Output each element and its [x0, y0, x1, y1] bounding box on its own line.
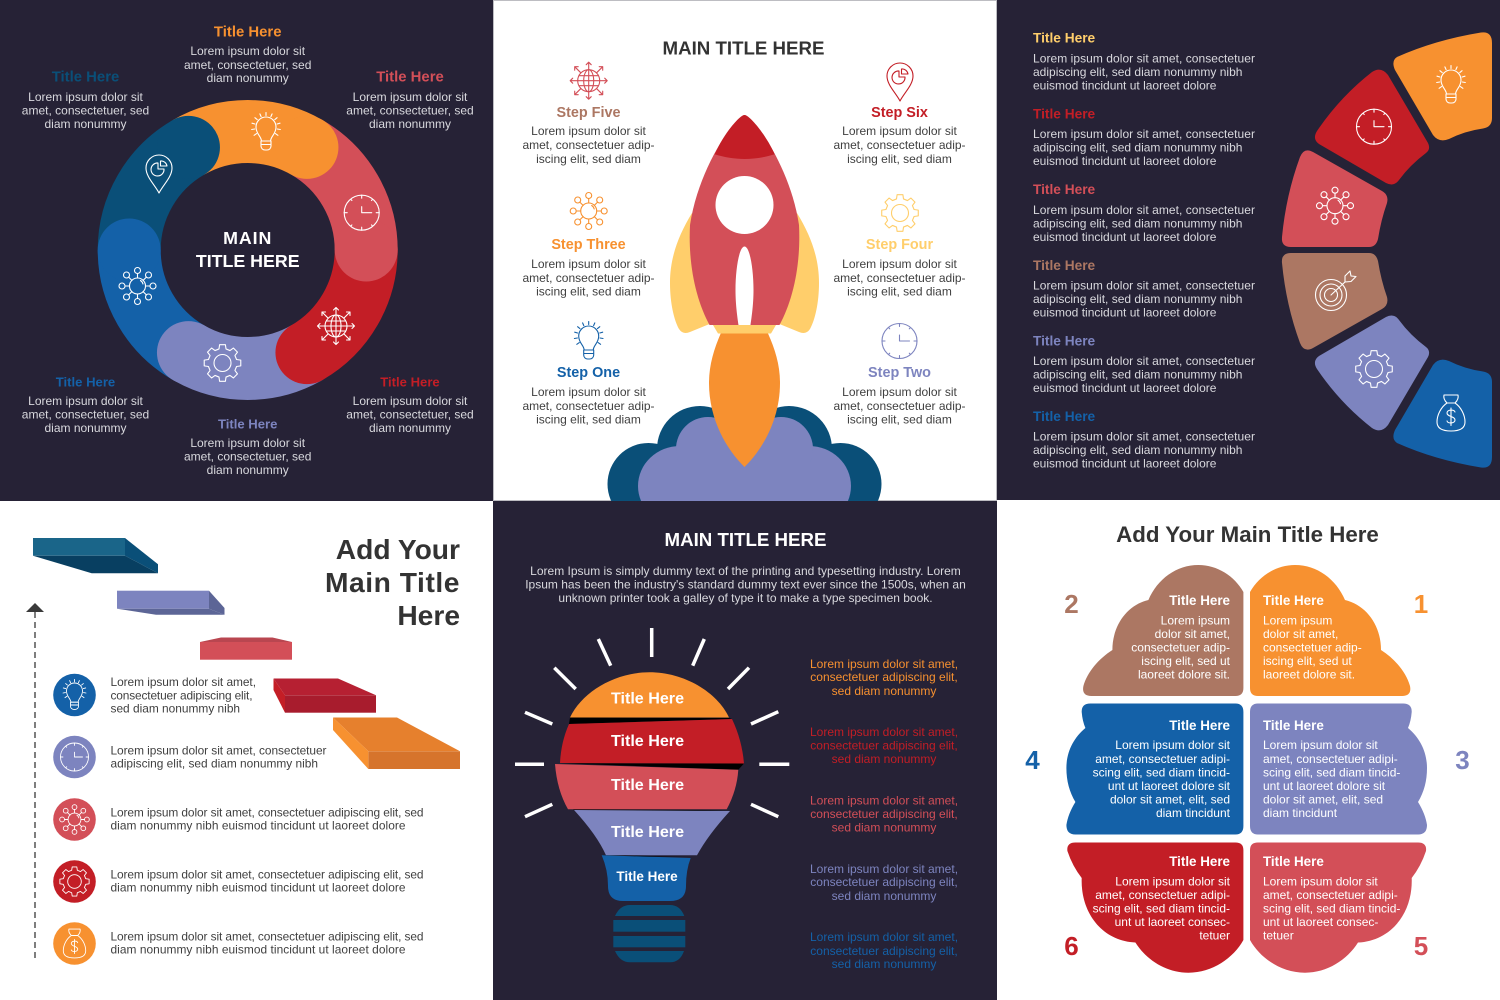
step six: amet, consectetuer adip- — [833, 138, 966, 152]
staircase title: Here — [397, 599, 460, 631]
card 1 text: iscing elit, sed ut — [1263, 654, 1352, 668]
list item 3: Title Here — [1033, 182, 1096, 197]
card 3 text: Lorem ipsum dolor sit — [1263, 738, 1378, 752]
list row 2 — [53, 736, 327, 778]
text: lower left: Lorem ipsum dolor sit — [28, 394, 144, 408]
list row 2: adipiscing elit, sed diam nonummy nibh — [110, 756, 318, 770]
rocket — [670, 115, 819, 467]
card 6 text: scing elit, sed diam tincid- — [1093, 902, 1230, 916]
side text periwinkle: Lorem ipsum dolor sit amet, — [810, 862, 958, 876]
list item 4: Title Here — [1033, 258, 1096, 273]
panel: light bulb — [493, 501, 997, 1000]
card 6 text: Title Here — [1169, 854, 1230, 869]
step six: Step Six — [871, 105, 928, 121]
list item 4: adipiscing elit, sed diam nonummy nibh — [1033, 292, 1242, 306]
list item 5 — [1033, 334, 1255, 395]
list row 1: Lorem ipsum dolor sit amet, — [110, 675, 256, 689]
card 3 text: amet, consectetuer adipi- — [1263, 752, 1398, 766]
step two: Lorem ipsum dolor sit — [842, 385, 958, 399]
card 1 text: Lorem ipsum — [1263, 614, 1332, 628]
step 3 salmon — [200, 638, 292, 660]
list item 6: Lorem ipsum dolor sit amet, consectetuer — [1033, 430, 1255, 444]
text: upper right: amet, consectetuer, sed — [346, 104, 474, 118]
card 1 text: dolor sit amet, — [1263, 627, 1338, 641]
list row 3: Lorem ipsum dolor sit amet, consectetuer adipiscing elit, sed — [110, 806, 424, 820]
numbers: 2 — [1064, 589, 1079, 619]
side text orange: sed diam nonummy — [832, 684, 936, 698]
bulb panel description: Lorem Ipsum is simply dummy text of the printing and typesetting industry. Lorem — [530, 564, 961, 578]
card 2 text: dolor sit amet, — [1155, 627, 1230, 641]
brain panel title: Add Your Main Title Here — [1116, 522, 1379, 547]
list item 3: Lorem ipsum dolor sit amet, consectetuer — [1033, 203, 1255, 217]
step four: amet, consectetuer adip- — [833, 271, 966, 285]
card 4 text: Lorem ipsum dolor sit — [1115, 738, 1231, 752]
list row 4: Lorem ipsum dolor sit amet, consectetuer adipiscing elit, sed — [110, 868, 424, 882]
bulb panel description — [525, 564, 966, 605]
list item 1 — [1033, 30, 1255, 92]
text: upper right: Title Here — [376, 70, 444, 86]
card 6 text: tetuer — [1199, 928, 1230, 942]
side text periwinkle: consectetuer adipiscing elit, — [810, 875, 958, 889]
text: upper right — [346, 70, 474, 131]
step one: iscing elit, sed diam — [536, 412, 641, 426]
numbers: 3 — [1455, 745, 1470, 775]
text: lower right: Title Here — [380, 374, 440, 390]
card 4 text: unt ut laoreet dolore sit — [1108, 779, 1231, 793]
card 6 text: unt ut laoreet consec- — [1115, 915, 1230, 929]
bulb labels: Title Here — [611, 823, 684, 841]
panel: brain cards — [997, 501, 1500, 1000]
step six: Lorem ipsum dolor sit — [842, 124, 958, 138]
step four: Lorem ipsum dolor sit — [842, 257, 958, 271]
list item 3 — [1033, 182, 1255, 244]
text: lower left: amet, consectetuer, sed — [22, 408, 149, 422]
text: bottom: Title Here — [218, 416, 277, 432]
petal shapes — [1282, 32, 1492, 468]
list item 4: euismod tincidunt ut laoreet dolore — [1033, 306, 1217, 320]
text: upper left: amet, consectetuer, sed — [22, 104, 149, 118]
ring center title: TITLE HERE — [196, 251, 300, 271]
step one — [522, 322, 655, 426]
text: bottom: Lorem ipsum dolor sit — [190, 436, 306, 450]
card 3 text: unt ut laoreet dolore sit — [1263, 779, 1386, 793]
side text red — [810, 725, 958, 766]
step three: amet, consectetuer adip- — [522, 271, 655, 285]
numbers: 1 — [1414, 589, 1428, 619]
card 5 text: scing elit, sed diam tincid- — [1263, 902, 1400, 916]
step two: Step Two — [868, 365, 931, 381]
staircase title: Add Your — [336, 533, 460, 565]
side text salmon — [810, 794, 958, 834]
bulb labels — [611, 690, 684, 884]
list item 2 — [1033, 106, 1255, 168]
list item 1: adipiscing elit, sed diam nonummy nibh — [1033, 65, 1242, 79]
text: upper left: diam nonummy — [44, 117, 127, 131]
list row 4: diam nonummy nibh euismod tincidunt ut laoreet dolore — [110, 880, 406, 894]
bulb labels: Title Here — [611, 732, 684, 750]
card 6 text — [1093, 854, 1231, 942]
cloud — [608, 406, 882, 501]
rocket panel title: MAIN TITLE HERE — [663, 38, 824, 58]
card 2 text: laoreet dolore sit. — [1138, 668, 1230, 682]
step five: iscing elit, sed diam — [536, 152, 641, 166]
side text red: sed diam nonummy — [832, 752, 936, 766]
petal icons — [1316, 66, 1465, 431]
list item 6 — [1033, 409, 1255, 470]
side text salmon: Lorem ipsum dolor sit amet, — [810, 794, 958, 808]
list item 5: Title Here — [1033, 334, 1096, 348]
card 2 text: iscing elit, sed ut — [1141, 654, 1231, 668]
numbers — [1025, 589, 1470, 961]
text: upper right: diam nonummy — [369, 117, 451, 131]
panel: staircase list — [0, 501, 493, 1000]
side text periwinkle — [810, 862, 958, 903]
ring icons — [119, 112, 379, 381]
text: lower right: diam nonummy — [369, 421, 451, 435]
card 3 text: Title Here — [1263, 718, 1324, 733]
list item 2: Title Here — [1033, 106, 1096, 122]
light rays — [515, 628, 789, 817]
list row 2: Lorem ipsum dolor sit amet, consectetuer — [110, 744, 327, 758]
step four — [833, 195, 966, 298]
text: lower left — [22, 374, 149, 435]
panel: petal list — [997, 0, 1500, 500]
list row 5 — [53, 922, 423, 965]
step one: Step One — [557, 365, 620, 381]
side text orange — [810, 657, 958, 698]
text: bottom — [184, 416, 311, 477]
list row 3: diam nonummy nibh euismod tincidunt ut laoreet dolore — [110, 818, 406, 832]
card 1 text: Title Here — [1263, 593, 1324, 608]
card 5 text: Title Here — [1263, 854, 1324, 869]
step two — [833, 324, 966, 426]
list item 3: euismod tincidunt ut laoreet dolore — [1033, 230, 1217, 244]
arrow — [26, 603, 44, 962]
text: lower left: Title Here — [56, 374, 115, 390]
card 5 text: unt ut laoreet consec- — [1263, 915, 1378, 929]
text: bottom: diam nonummy — [207, 463, 289, 477]
list item 4: Lorem ipsum dolor sit amet, consectetuer — [1033, 278, 1255, 292]
card 4 text: diam tincidunt — [1156, 806, 1231, 820]
side text blue — [810, 930, 958, 971]
bulb base — [613, 905, 685, 962]
text: lower right: Lorem ipsum dolor sit — [353, 394, 468, 408]
list item 2: Lorem ipsum dolor sit amet, consectetuer — [1033, 127, 1255, 141]
bulb labels: Title Here — [616, 869, 678, 884]
text: top: Lorem ipsum dolor sit — [190, 44, 306, 58]
step two: amet, consectetuer adip- — [833, 399, 966, 413]
side text blue: consectetuer adipiscing elit, — [810, 944, 958, 958]
card 5 text: Lorem ipsum dolor sit — [1263, 874, 1378, 888]
side text salmon: sed diam nonummy — [832, 820, 936, 834]
card 4 text: amet, consectetuer adipi- — [1095, 752, 1230, 766]
step 5 orange — [333, 718, 460, 769]
step one: Lorem ipsum dolor sit — [531, 385, 647, 399]
side text orange: consectetuer adipiscing elit, — [810, 670, 958, 684]
step three — [522, 192, 655, 298]
text: bottom: amet, consectetuer, sed — [184, 450, 311, 464]
step five: amet, consectetuer adip- — [522, 138, 655, 152]
panel: rocket steps — [494, 0, 996, 526]
step five — [522, 62, 655, 166]
text: top: amet, consectetuer, sed — [184, 58, 311, 72]
step five: Step Five — [557, 105, 620, 121]
card 5 text: amet, consectetuer adipi- — [1263, 888, 1398, 902]
step 1 dark blue — [33, 538, 158, 573]
step four: iscing elit, sed diam — [847, 284, 952, 298]
side text periwinkle: sed diam nonummy — [832, 889, 936, 903]
list item 5: Lorem ipsum dolor sit amet, consectetuer — [1033, 354, 1255, 368]
text: lower left: diam nonummy — [44, 421, 127, 435]
text: upper left: Lorem ipsum dolor sit — [28, 90, 144, 104]
panel: circular ring diagram — [0, 0, 493, 501]
text: upper left — [22, 70, 149, 131]
card 1 text: laoreet dolore sit. — [1263, 668, 1355, 682]
brain shapes — [1066, 565, 1427, 973]
list row 1 — [53, 674, 256, 716]
numbers: 5 — [1414, 931, 1428, 961]
side text red: Lorem ipsum dolor sit amet, — [810, 725, 958, 739]
list item 6: Title Here — [1033, 409, 1096, 424]
list item 1: Title Here — [1033, 30, 1096, 46]
bulb panel description: unknown printer took a galley of type it to make a type specimen book. — [558, 591, 933, 605]
text: upper left: Title Here — [52, 70, 119, 86]
step 2 periwinkle — [117, 591, 224, 615]
card 1 text: consectetuer adip- — [1263, 640, 1362, 654]
side text red: consectetuer adipiscing elit, — [810, 738, 958, 752]
step four: Step Four — [866, 237, 933, 253]
list item 2: euismod tincidunt ut laoreet dolore — [1033, 154, 1217, 168]
side text orange: Lorem ipsum dolor sit amet, — [810, 657, 958, 671]
ring chart — [98, 116, 398, 384]
numbers: 4 — [1025, 745, 1040, 775]
list item 3: adipiscing elit, sed diam nonummy nibh — [1033, 216, 1242, 230]
list row 4 — [53, 860, 423, 903]
numbers: 6 — [1064, 931, 1079, 961]
text: lower right: amet, consectetuer, sed — [346, 408, 474, 422]
step six: iscing elit, sed diam — [847, 152, 952, 166]
text: upper right: Lorem ipsum dolor sit — [353, 90, 468, 104]
step two: iscing elit, sed diam — [847, 412, 952, 426]
list item 1: euismod tincidunt ut laoreet dolore — [1033, 78, 1217, 92]
step three: Step Three — [551, 237, 626, 253]
card 5 text: tetuer — [1263, 928, 1294, 942]
side text blue: Lorem ipsum dolor sit amet, — [810, 930, 958, 944]
step six — [833, 63, 966, 166]
card 3 text — [1263, 718, 1400, 820]
ring center title: MAIN — [223, 228, 272, 248]
text: top: diam nonummy — [207, 71, 289, 85]
card 3 text: scing elit, sed diam tincid- — [1263, 766, 1400, 780]
step three: iscing elit, sed diam — [536, 284, 641, 298]
list row 5: Lorem ipsum dolor sit amet, consectetuer adipiscing elit, sed — [110, 930, 424, 944]
list item 6: euismod tincidunt ut laoreet dolore — [1033, 456, 1217, 470]
staircase title: Main Title — [325, 566, 460, 598]
list row 5: diam nonummy nibh euismod tincidunt ut laoreet dolore — [110, 942, 406, 956]
side text salmon: consectetuer adipiscing elit, — [810, 807, 958, 821]
card 4 text: scing elit, sed diam tincid- — [1093, 766, 1230, 780]
card 2 text — [1131, 593, 1231, 682]
card 2 text: Title Here — [1169, 593, 1230, 608]
list item 6: adipiscing elit, sed diam nonummy nibh — [1033, 443, 1242, 457]
list item 4 — [1033, 258, 1255, 320]
card 4 text — [1093, 718, 1231, 820]
card 4 text: Title Here — [1169, 718, 1230, 733]
list item 5: adipiscing elit, sed diam nonummy nibh — [1033, 368, 1242, 382]
card 6 text: amet, consectetuer adipi- — [1095, 888, 1230, 902]
bulb panel title: MAIN TITLE HERE — [665, 529, 826, 550]
card 5 text — [1263, 854, 1400, 942]
list row 3 — [53, 798, 423, 841]
card 3 text: dolor sit amet, elit, sed — [1263, 792, 1383, 806]
bulb panel description: Ipsum has been the industry's standard dummy text ever since the 1500s, when an — [525, 578, 966, 592]
step 4 red — [274, 678, 376, 713]
text: top: Title Here — [214, 24, 281, 40]
card 2 text: consectetuer adip- — [1131, 640, 1230, 654]
list item 1: Lorem ipsum dolor sit amet, consectetuer — [1033, 52, 1255, 66]
step three: Lorem ipsum dolor sit — [531, 257, 647, 271]
text: lower right — [346, 374, 474, 435]
step one: amet, consectetuer adip- — [522, 399, 655, 413]
list item 2: adipiscing elit, sed diam nonummy nibh — [1033, 140, 1242, 154]
bulb labels: Title Here — [611, 690, 684, 708]
card 3 text: diam tincidunt — [1263, 806, 1338, 820]
card 6 text: Lorem ipsum dolor sit — [1115, 874, 1231, 888]
side text blue: sed diam nonummy — [832, 957, 936, 971]
text: top — [184, 24, 311, 85]
card 2 text: Lorem ipsum — [1161, 614, 1230, 628]
card 1 text — [1263, 593, 1362, 682]
step five: Lorem ipsum dolor sit — [531, 124, 647, 138]
list item 5: euismod tincidunt ut laoreet dolore — [1033, 381, 1217, 395]
list row 1: sed diam nonummy nibh — [110, 702, 240, 716]
bulb segments — [555, 672, 744, 901]
card 4 text: dolor sit amet, elit, sed — [1110, 792, 1230, 806]
bulb labels: Title Here — [611, 776, 684, 794]
list row 1: consectetuer adipiscing elit, — [110, 688, 252, 702]
